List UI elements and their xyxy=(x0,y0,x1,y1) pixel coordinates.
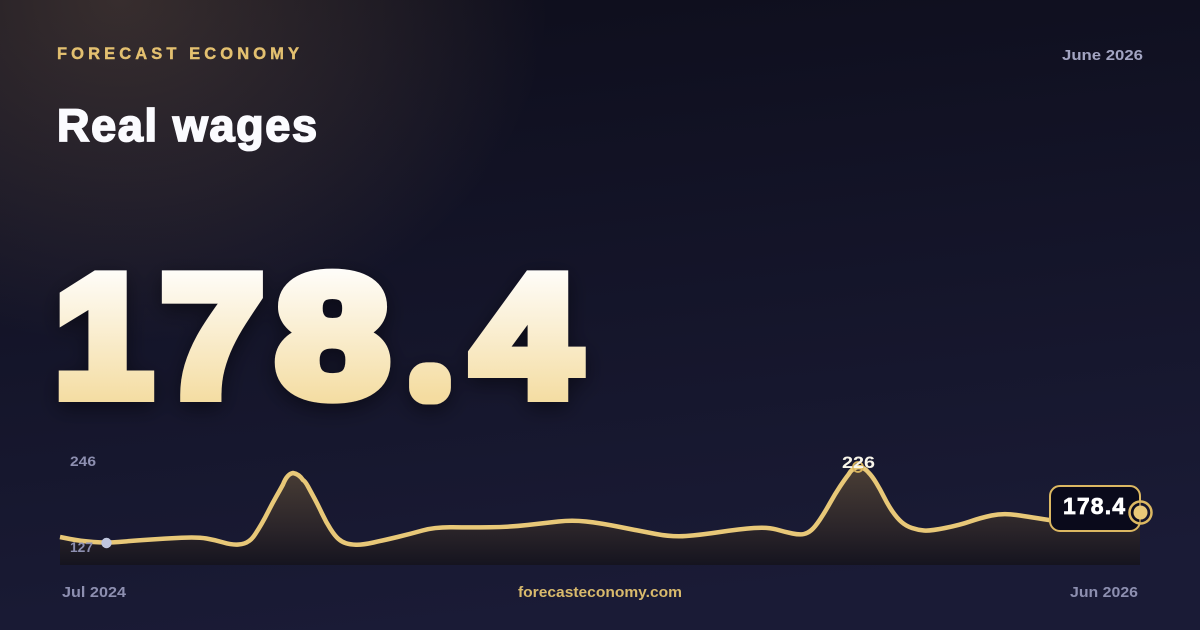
big value: . xyxy=(422,338,438,400)
big value: 7 xyxy=(162,241,263,432)
current value marker xyxy=(1130,502,1152,524)
website: forecasteconomy.com xyxy=(518,585,682,601)
end date: Jun 2026 xyxy=(1070,585,1138,601)
minimum marker xyxy=(101,538,112,548)
big value: 1 xyxy=(55,241,152,432)
big value: 8 xyxy=(277,240,388,432)
title: Real wages xyxy=(57,100,317,151)
y-axis max: 246 xyxy=(70,454,97,469)
chart area fill xyxy=(60,466,1140,565)
current value badge: 178.4 xyxy=(1063,493,1125,519)
line chart xyxy=(60,453,1152,565)
peak marker xyxy=(853,462,863,472)
start date: Jul 2024 xyxy=(62,585,126,601)
date: June 2026 xyxy=(1062,47,1143,64)
big value: 4 xyxy=(473,241,579,432)
y-axis min: 127 xyxy=(70,540,93,555)
big value xyxy=(55,240,579,432)
peak label: 226 xyxy=(842,453,875,472)
brand label: FORECAST ECONOMY xyxy=(57,45,299,63)
price line xyxy=(60,467,1055,545)
current value badge xyxy=(1050,486,1140,531)
